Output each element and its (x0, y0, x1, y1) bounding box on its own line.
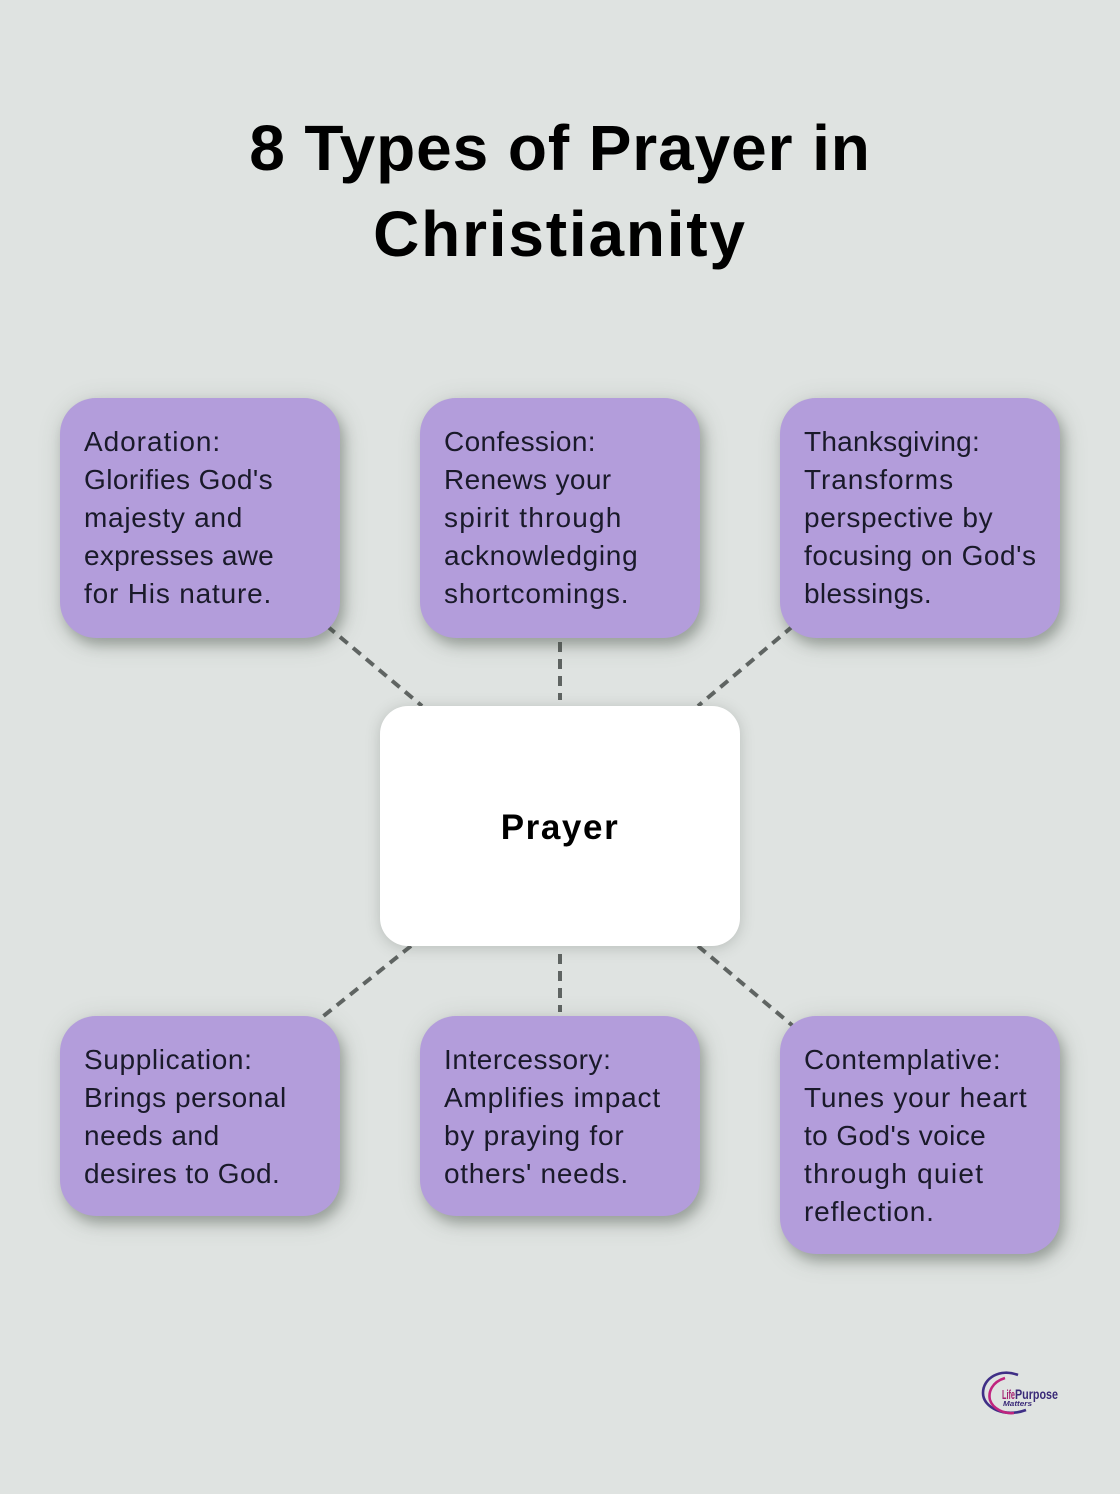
panel: confession: spirit through (444, 502, 623, 533)
panel: intercessory: Amplifies impact (444, 1082, 661, 1113)
logo: Life Purpose Matters: Matters (1003, 1401, 1032, 1408)
panel: supplication (60, 1016, 340, 1216)
logo: Life Purpose Matters (982, 1371, 1058, 1414)
panel: adoration: expresses awe (84, 540, 274, 571)
panel: confession: Confession: (444, 426, 596, 457)
panel: intercessory: by praying for (444, 1120, 624, 1151)
panel: thanksgiving: Transforms (804, 464, 954, 495)
panel: intercessory (420, 1016, 700, 1216)
title (249, 112, 871, 270)
title: Christianity (373, 198, 747, 270)
panel: adoration: Glorifies God's (84, 464, 273, 495)
panel: intercessory: Intercessory: (444, 1044, 611, 1075)
panel: supplication: Supplication: (84, 1044, 253, 1075)
panel: adoration: majesty and (84, 502, 243, 533)
panel: contemplative: Tunes your heart (804, 1082, 1027, 1113)
title: 8 Types of Prayer in (249, 112, 871, 184)
panel: contemplative: Contemplative: (804, 1044, 1001, 1075)
logo: Life Purpose Matters: Life (1002, 1387, 1015, 1402)
panel: contemplative (780, 1016, 1060, 1254)
panel: thanksgiving: blessings. (804, 578, 932, 609)
panel: adoration: for His nature. (84, 578, 272, 609)
panel: confession (420, 398, 700, 638)
panel: supplication: Brings personal (84, 1082, 287, 1113)
panel: center prayer: Prayer (501, 808, 619, 847)
panel: thanksgiving: focusing on God's (804, 540, 1037, 571)
panel: confession: acknowledging (444, 540, 638, 571)
panel: confession: Renews your (444, 464, 611, 495)
panel: supplication: needs and (84, 1120, 220, 1151)
panel: contemplative: to God's voice (804, 1120, 986, 1151)
panel: contemplative: reflection. (804, 1196, 935, 1227)
panel: thanksgiving (780, 398, 1060, 638)
panel: adoration: Adoration: (84, 426, 221, 457)
panel: thanksgiving: Thanksgiving: (804, 426, 980, 457)
panel: thanksgiving: perspective by (804, 502, 993, 533)
panel: intercessory: others' needs. (444, 1158, 629, 1189)
panel: confession: shortcomings. (444, 578, 629, 609)
panel: contemplative: through quiet (804, 1158, 984, 1189)
panel: center prayer (380, 706, 740, 946)
panel: adoration (60, 398, 340, 638)
panel: supplication: desires to God. (84, 1158, 280, 1189)
